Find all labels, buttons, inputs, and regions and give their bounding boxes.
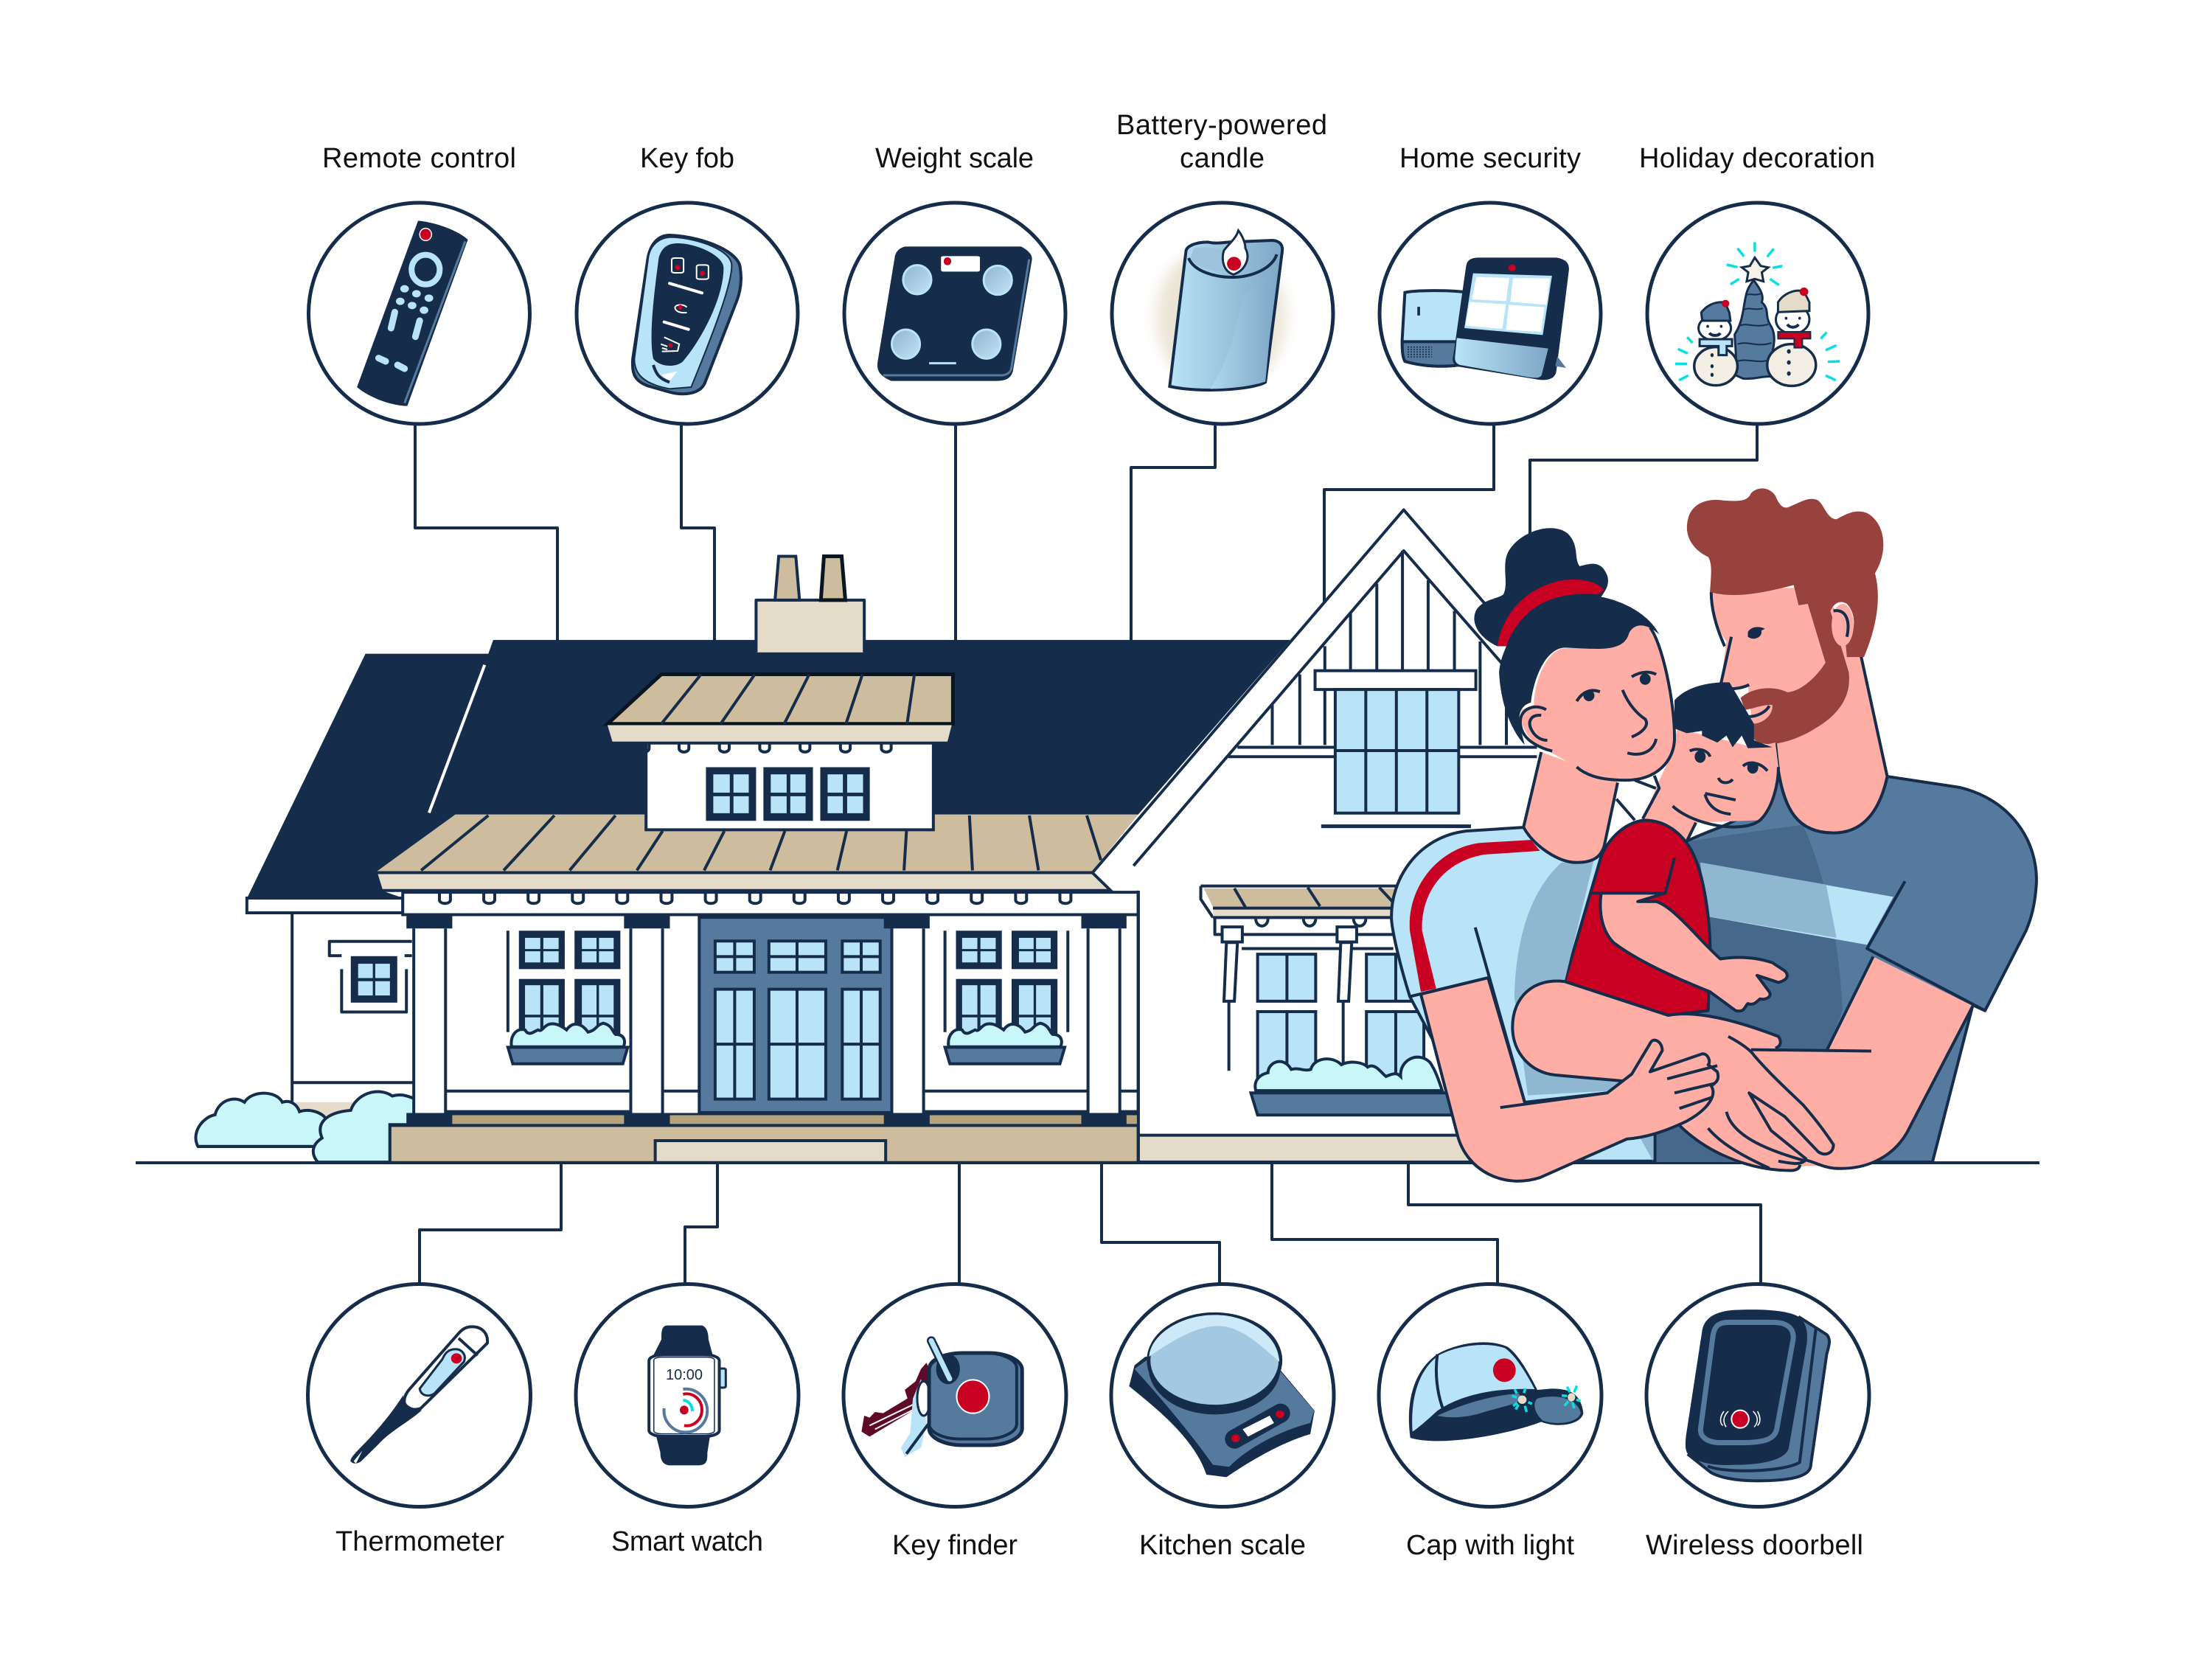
icon: cap with light [1409, 1342, 1583, 1441]
circle: key fob [577, 203, 798, 424]
icons: thermometer, watch, key finder [350, 1326, 1022, 1465]
gable outline [1092, 509, 1659, 1135]
label: home security: Home security [1399, 143, 1581, 174]
porch walls and frieze [403, 891, 1138, 1163]
main navy roof [247, 640, 1290, 899]
label: battery-powered candle: candle [1180, 143, 1265, 174]
chimney [756, 557, 864, 653]
woman: neck, head and hair [1474, 528, 1674, 863]
icons: kitchen scale, cap, doorbell [1129, 1310, 1829, 1481]
icon: thermometer [350, 1326, 487, 1464]
porch columns [406, 916, 1137, 1125]
icons: candle, home security, holiday decoration [1156, 231, 1840, 391]
bushes [195, 1091, 416, 1162]
right porch windows with planter [945, 931, 1065, 1064]
circle: kitchen scale [1111, 1284, 1334, 1507]
icon: home security [1402, 257, 1569, 380]
front door panel [699, 917, 891, 1113]
circle: smart watch [576, 1284, 799, 1507]
icon: smart watch [649, 1326, 726, 1465]
circle: wireless doorbell [1646, 1284, 1869, 1507]
label: key finder: Key finder [892, 1530, 1018, 1561]
man: arm and hands [1677, 956, 1973, 1171]
icon: wireless doorbell [1686, 1310, 1829, 1481]
circle: remote control [308, 203, 529, 424]
label: thermometer: Thermometer [335, 1526, 504, 1557]
label: battery-powered candle [1116, 110, 1327, 174]
baby: red shirt and arm [1565, 820, 1787, 1015]
porch base and step [390, 1125, 1138, 1163]
circle: weight scale [844, 203, 1065, 424]
icon: candle [1156, 231, 1286, 391]
horizon line [136, 1161, 2039, 1164]
label: cap with light: Cap with light [1406, 1530, 1574, 1561]
label: key fob: Key fob [640, 143, 734, 174]
circle: cap with light [1379, 1284, 1601, 1507]
bottom row labels [335, 1367, 1863, 1561]
house: main building [195, 557, 1290, 1163]
label: battery-powered candle: Battery-powered [1116, 110, 1327, 141]
circle: key finder [844, 1284, 1066, 1507]
label: remote control: Remote control [322, 143, 516, 174]
icon: weight scale [877, 246, 1032, 381]
left wing wall and window [247, 898, 414, 1116]
man: torso and t-shirt [1656, 771, 2037, 1162]
baby: leg [1512, 981, 1781, 1091]
circle: home security [1380, 203, 1601, 424]
family illustration [1391, 488, 2037, 1181]
circle: candle [1112, 203, 1333, 424]
upper gable window [1315, 671, 1476, 827]
label: weight scale: Weight scale [875, 143, 1034, 174]
icon: key fob [633, 235, 741, 394]
connector lines: top devices to house [415, 425, 1757, 640]
man: neck, face and beard [1687, 488, 1888, 833]
top row labels [322, 110, 1875, 174]
dormer [608, 674, 953, 830]
label: holiday decoration: Holiday decoration [1639, 143, 1875, 174]
label: kitchen scale: Kitchen scale [1139, 1530, 1306, 1561]
label: smart watch: Smart watch [611, 1526, 763, 1557]
circle: holiday decoration [1647, 203, 1868, 424]
bottom row device circles [308, 1284, 1869, 1507]
baby: head and hair [1643, 682, 1778, 841]
woman: arm and hand [1410, 928, 1718, 1181]
icon: holiday decoration [1675, 242, 1840, 386]
woman: shirt with red stripe [1391, 827, 1655, 1161]
label: wireless doorbell: Wireless doorbell [1646, 1530, 1863, 1561]
icon: remote control [357, 220, 467, 406]
label: watch time: 10:00 [666, 1367, 703, 1383]
icon: key finder [861, 1340, 1022, 1457]
house: right gable wing [1092, 488, 2037, 1181]
wing porch roof, posts and windows [1138, 886, 1472, 1162]
icons: remote, key fob, weight scale [357, 220, 1032, 406]
porch roof [376, 815, 1138, 891]
connector lines: bottom devices to house [420, 1163, 1761, 1284]
icon: kitchen scale [1129, 1314, 1315, 1477]
top row device circles [308, 203, 1868, 424]
left porch windows with planter [508, 931, 627, 1064]
circle: thermometer [308, 1284, 531, 1507]
